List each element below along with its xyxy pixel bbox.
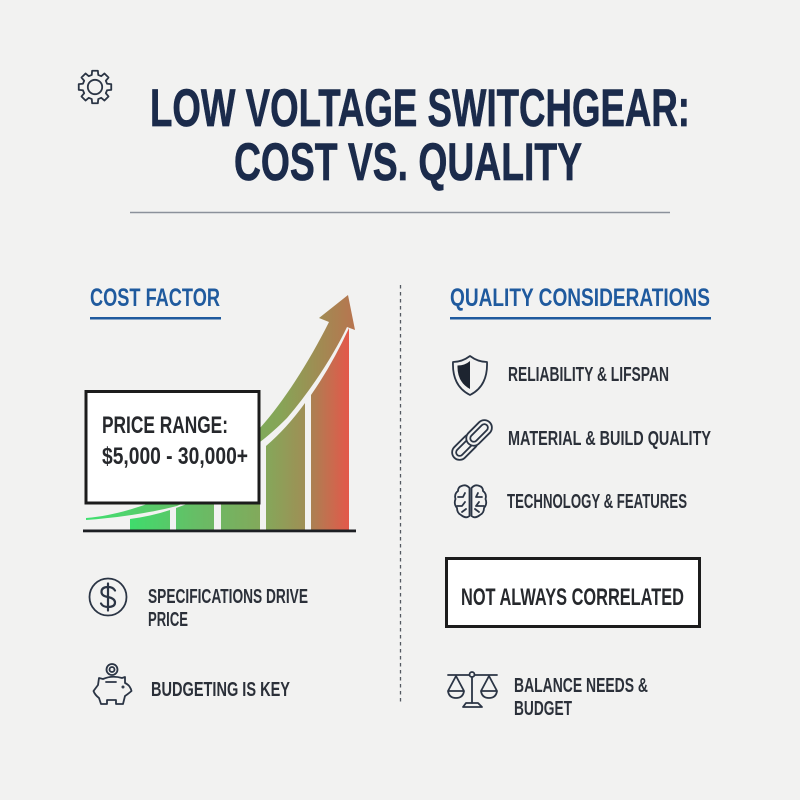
- callout: price range: PRICE RANGE:: [102, 412, 228, 439]
- icon: gear: [79, 71, 111, 103]
- heading: quality considerations: QUALITY CONSIDERATIONS: [450, 284, 710, 312]
- callout: not always correlated: [446, 558, 700, 626]
- text: balance needs and budget: BUDGET: [514, 698, 572, 720]
- icon: dollar coin: [90, 578, 126, 616]
- callout: not always correlated: NOT ALWAYS CORRELATED: [461, 584, 684, 611]
- text: balance needs and budget: BALANCE NEEDS &: [514, 675, 648, 697]
- title: COST VS. QUALITY: [234, 133, 582, 192]
- title: [150, 79, 690, 192]
- text: specifications drive price: [148, 586, 308, 631]
- heading: cost factor: COST FACTOR: [90, 284, 220, 312]
- chart: rising cost bars and arrow: [83, 295, 356, 532]
- chart baseline: [83, 530, 356, 532]
- bars: [130, 328, 349, 530]
- growth arrow: [86, 295, 355, 520]
- callout: price range: [86, 392, 259, 503]
- text: material and build quality: MATERIAL & BUILD QUALITY: [508, 428, 711, 450]
- text: specifications drive price: PRICE: [148, 609, 188, 631]
- text: balance needs and budget: [514, 675, 648, 720]
- text: reliability and lifespan: RELIABILITY & LIFSPAN: [508, 364, 669, 386]
- heading: cost factor: [90, 284, 221, 320]
- text: technology and features: TECHNOLOGY & FEATURES: [507, 491, 687, 513]
- icon: chain link: [449, 417, 495, 463]
- icon: brain: [455, 485, 486, 517]
- text: budgeting is key: BUDGETING IS KEY: [151, 679, 290, 701]
- icon: shield: [453, 356, 487, 395]
- callout: price range: $5,000 - 30,000+: [102, 443, 248, 470]
- icon: piggy bank: [94, 664, 132, 704]
- icon: balance scales: [448, 672, 497, 707]
- text: specifications drive price: SPECIFICATIONS DRIVE: [148, 586, 308, 608]
